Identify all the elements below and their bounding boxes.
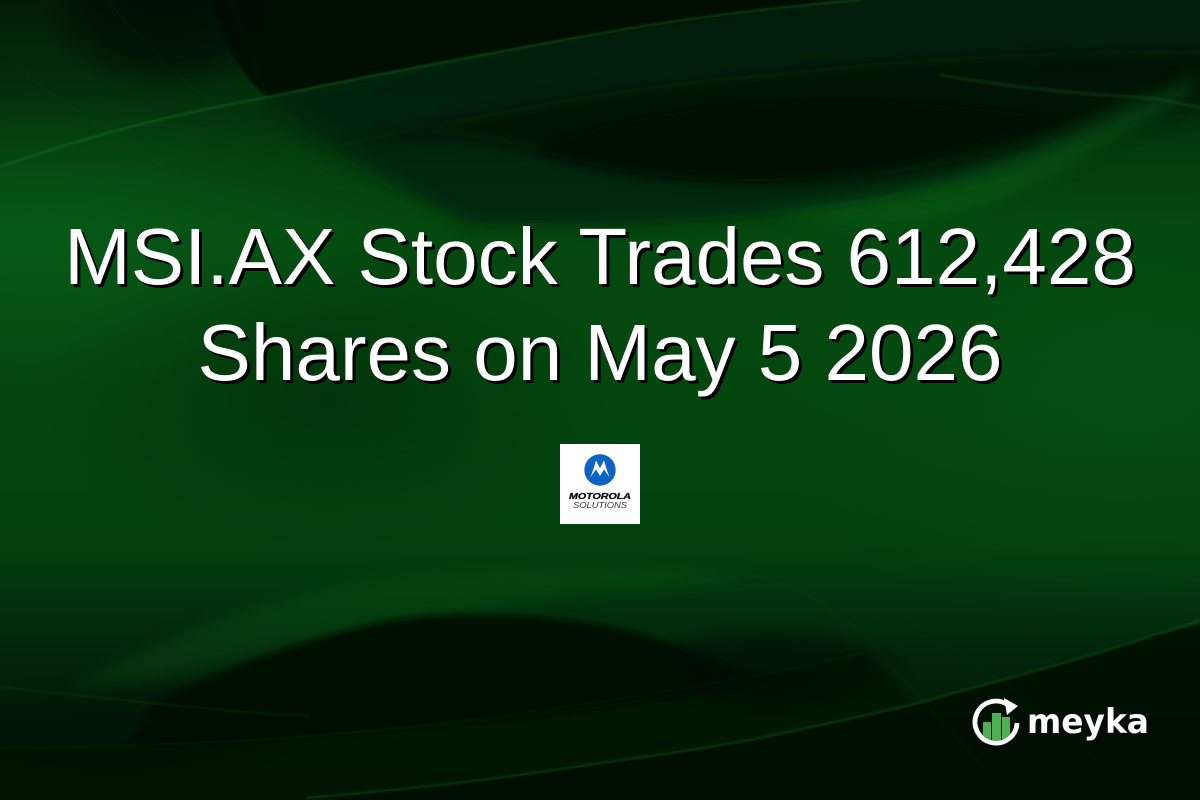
wordmark: meyka [1027, 702, 1149, 742]
title: MSI.AX Stock Trades 612,428 [64, 212, 1136, 301]
title: Shares on May 5 2026 [198, 308, 1002, 397]
bottom strip shading [0, 653, 918, 800]
soft shade lower left [0, 670, 320, 790]
logo: meyka [972, 698, 1149, 746]
logo: Motorola Solutions: MOTOROLA [569, 492, 631, 501]
soft shade lower right of hump [620, 620, 920, 720]
logo: Motorola Solutions [560, 444, 640, 524]
darkest bottom right below bright line [306, 610, 1200, 800]
soft shade top-left corner [40, 0, 300, 95]
dark upper band right of the sweeping curves [268, 0, 1200, 226]
light swoosh band lower left [60, 568, 760, 695]
dark hump lower centre [130, 615, 770, 745]
logo: Motorola Solutions: SOLUTIONS [573, 501, 628, 510]
dark top-left wedge [200, 0, 880, 97]
dark lens upper right [337, 51, 1200, 181]
bright swoosh band upper right [760, 70, 1200, 223]
title [64, 212, 1136, 400]
icon: chart bars in circular arrow [975, 698, 1018, 743]
